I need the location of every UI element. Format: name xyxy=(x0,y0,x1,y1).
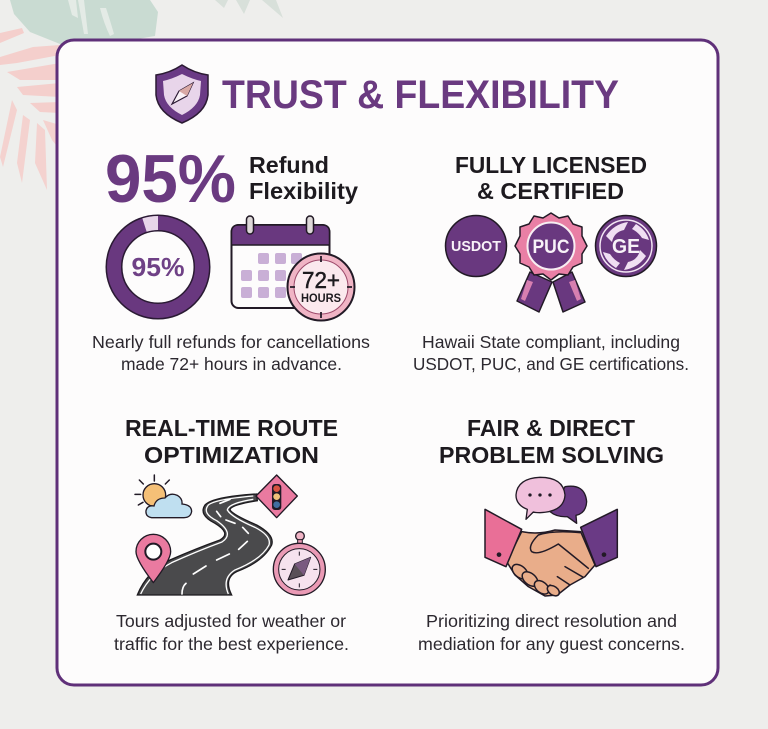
badge: USDOT: USDOT xyxy=(451,238,501,255)
heading: route optimization: REAL-TIME ROUTE xyxy=(125,415,338,441)
heading: fully licensed: & CERTIFIED xyxy=(477,178,624,204)
icon: route illustration xyxy=(135,475,325,595)
donut chart: 95% xyxy=(114,223,202,311)
icon: handshake with speech bubbles xyxy=(485,477,617,598)
description: mediation: Prioritizing direct resolution and xyxy=(426,611,677,631)
title: TRUST & FLEXIBILITY xyxy=(222,73,619,117)
badge: PUC rosette xyxy=(515,213,587,312)
icon: calendar with 72+ hours clock: 72+ xyxy=(302,267,340,293)
left cuff xyxy=(485,509,522,567)
icon: map pin xyxy=(136,534,171,583)
description: refunds: Nearly full refunds for cancellations xyxy=(92,332,370,352)
heading: problem solving: PROBLEM SOLVING xyxy=(439,442,664,468)
heading: refund flexibility xyxy=(249,152,358,204)
icon: speech bubbles xyxy=(516,477,587,523)
right cuff xyxy=(581,509,617,567)
cuff buttons xyxy=(497,552,606,557)
icon: compass xyxy=(273,532,325,595)
description: tours: traffic for the best experience. xyxy=(114,634,349,654)
panel: fair and direct problem solving xyxy=(418,415,685,654)
heading: problem solving: FAIR & DIRECT xyxy=(467,415,635,441)
description: refunds xyxy=(92,332,370,374)
badge: GE: GE xyxy=(612,236,640,258)
main card panel xyxy=(57,40,718,685)
heading: fully licensed xyxy=(455,152,647,204)
badge: USDOT xyxy=(446,216,506,276)
heading with shield icon xyxy=(156,65,619,123)
heading: problem solving xyxy=(439,415,664,468)
description: certifications: Hawaii State compliant, including xyxy=(422,332,680,352)
panel: real-time route optimization xyxy=(114,415,349,654)
heading: fully licensed: FULLY LICENSED xyxy=(455,152,647,178)
heading: route optimization xyxy=(125,415,338,468)
icon: calendar with 72+ hours clock: HOURS xyxy=(301,293,341,305)
description: certifications: USDOT, PUC, and GE certifications. xyxy=(413,354,689,374)
heading: refund flexibility: Flexibility xyxy=(249,178,358,204)
description: certifications xyxy=(413,332,689,374)
road xyxy=(137,494,272,595)
heading: refund flexibility: Refund xyxy=(249,152,329,178)
badge: GE xyxy=(596,216,656,276)
description: tours xyxy=(114,611,349,654)
icon: sun and cloud xyxy=(135,475,192,518)
heading: route optimization: OPTIMIZATION xyxy=(144,442,319,468)
donut chart: 95%: 95% xyxy=(132,252,184,282)
description: mediation xyxy=(418,611,685,654)
icon: shield with compass xyxy=(156,65,208,123)
icon: traffic sign xyxy=(256,475,297,518)
description: mediation: mediation for any guest concerns. xyxy=(418,634,685,654)
panel: licensed and certified xyxy=(413,152,689,374)
icon: calendar with 72+ hours clock xyxy=(232,216,354,320)
hands xyxy=(507,530,595,598)
background: tropical leaves xyxy=(0,0,283,190)
badge: PUC rosette: PUC xyxy=(532,237,570,258)
panel: refund flexibility xyxy=(92,141,370,374)
description: tours: Tours adjusted for weather or xyxy=(116,611,346,631)
description: refunds: made 72+ hours in advance. xyxy=(121,354,342,374)
big stat 95%: 95% xyxy=(105,141,236,217)
